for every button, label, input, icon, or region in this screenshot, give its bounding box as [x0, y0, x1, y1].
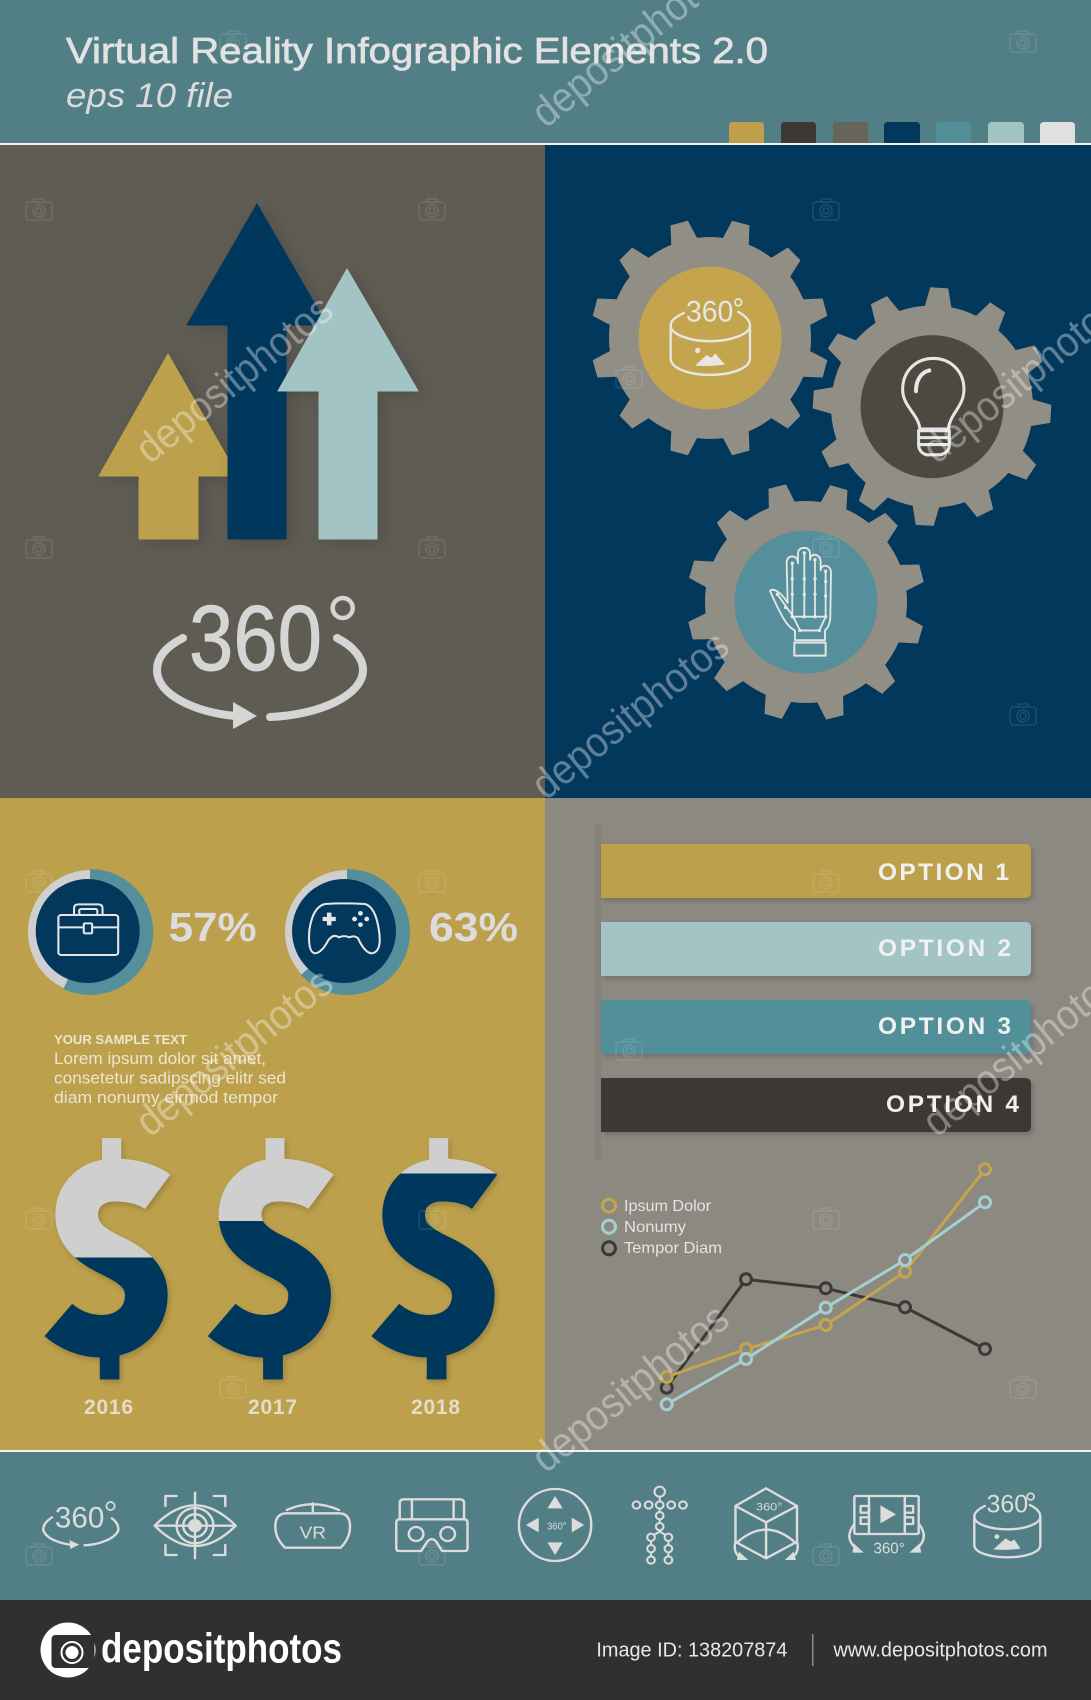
text block: sample text: Lorem ipsum dolor sit amet, [54, 1049, 266, 1068]
icon: navy arrow [187, 204, 327, 539]
option bar 2 [601, 922, 1031, 976]
text block: sample text: consetetur sadipscing elitr sed [54, 1068, 286, 1088]
option bar 4 [601, 1078, 1031, 1132]
icon: light teal arrow [278, 269, 418, 539]
logo wordmark: depositphotos [101, 1624, 342, 1672]
option bar 2: OPTION 2 [878, 935, 1011, 962]
percentage: 57%: 57% [169, 904, 257, 950]
percentage: 63%: 63% [429, 904, 518, 950]
icon: cardboard viewer [396, 1499, 468, 1551]
panel: statistics [0, 798, 545, 1450]
icon: 360 video: 360° [873, 1541, 905, 1557]
website: www.depositphotos.com [833, 1640, 1048, 1662]
year labels: 2018 [411, 1396, 460, 1419]
option bar 1: OPTION 1 [878, 859, 1009, 886]
icon: gear with light bulb [806, 281, 1058, 533]
watermark: depositphotos [126, 285, 341, 472]
line chart [661, 1164, 990, 1410]
icon: eye tracking [155, 1493, 236, 1558]
icon: 360 directional pad [519, 1489, 591, 1561]
icon: VR headset [275, 1503, 350, 1548]
icon: 360 cylinder [974, 1491, 1040, 1557]
pictogram chart: dollar fill levels by year [58, 1138, 485, 1379]
icon: 360 rotate symbol: 360 [189, 586, 322, 690]
image id: Image ID: 138207874 [596, 1640, 787, 1662]
donut chart: 63% [285, 869, 410, 995]
icon: gold arrow [99, 354, 238, 539]
panel: growth arrows and 360 [0, 145, 545, 798]
panel: icon strip [0, 1452, 1091, 1600]
footer bar [0, 1600, 1091, 1700]
icon: 360 cylinder: 360 [986, 1491, 1028, 1519]
icon: 360 rotate: 360 [55, 1501, 104, 1534]
icon: 360 video [849, 1496, 924, 1557]
icon: 360 directional pad: 360° [547, 1521, 567, 1532]
watermark: depositphotos [126, 958, 341, 1145]
donut chart: 57% [28, 869, 153, 995]
watermark: depositphotos [522, 1294, 737, 1481]
panel: header band [0, 0, 1091, 143]
icon: 360 cube [735, 1488, 798, 1560]
text block: sample text: diam nonumy eirmod tempor [54, 1088, 278, 1107]
legend: Nonumy [624, 1219, 686, 1236]
icon: skeleton tracking [633, 1487, 687, 1564]
panel: options and line chart [545, 798, 1091, 1450]
title: Virtual Reality Infographic Elements 2.0 [66, 30, 768, 71]
icon: VR headset: VR [300, 1523, 326, 1542]
option bar 1 [601, 844, 1031, 898]
option bar 3 [601, 1000, 1031, 1054]
year labels [84, 1396, 460, 1419]
icon: 360 cube: 360° [756, 1502, 782, 1514]
option bar 3: OPTION 3 [878, 1013, 1011, 1040]
panel: gears [545, 145, 1091, 798]
option bar 4: OPTION 4 [886, 1091, 1019, 1118]
legend: Ipsum Dolor [624, 1198, 712, 1215]
watermark: depositphotos [522, 621, 737, 808]
icon: 360 rotate [43, 1501, 118, 1549]
year labels: 2016 [84, 1396, 133, 1419]
icon: gear with sensor hand [659, 455, 953, 749]
subtitle: eps 10 file [66, 77, 233, 115]
icon: depositphotos camera logo [40, 1622, 96, 1678]
legend: Tempor Diam [624, 1240, 722, 1257]
year labels: 2017 [248, 1396, 297, 1419]
icon: gear with 360 cylinder: 360 [686, 296, 733, 329]
text block: sample text [54, 1033, 286, 1107]
colour swatches [729, 122, 1075, 143]
text block: sample text: YOUR SAMPLE TEXT [54, 1033, 187, 1047]
legend [602, 1198, 722, 1257]
watermark [126, 0, 1091, 1481]
icon: gear with 360 cylinder [564, 192, 856, 484]
icon: 360 rotate symbol [157, 586, 363, 729]
